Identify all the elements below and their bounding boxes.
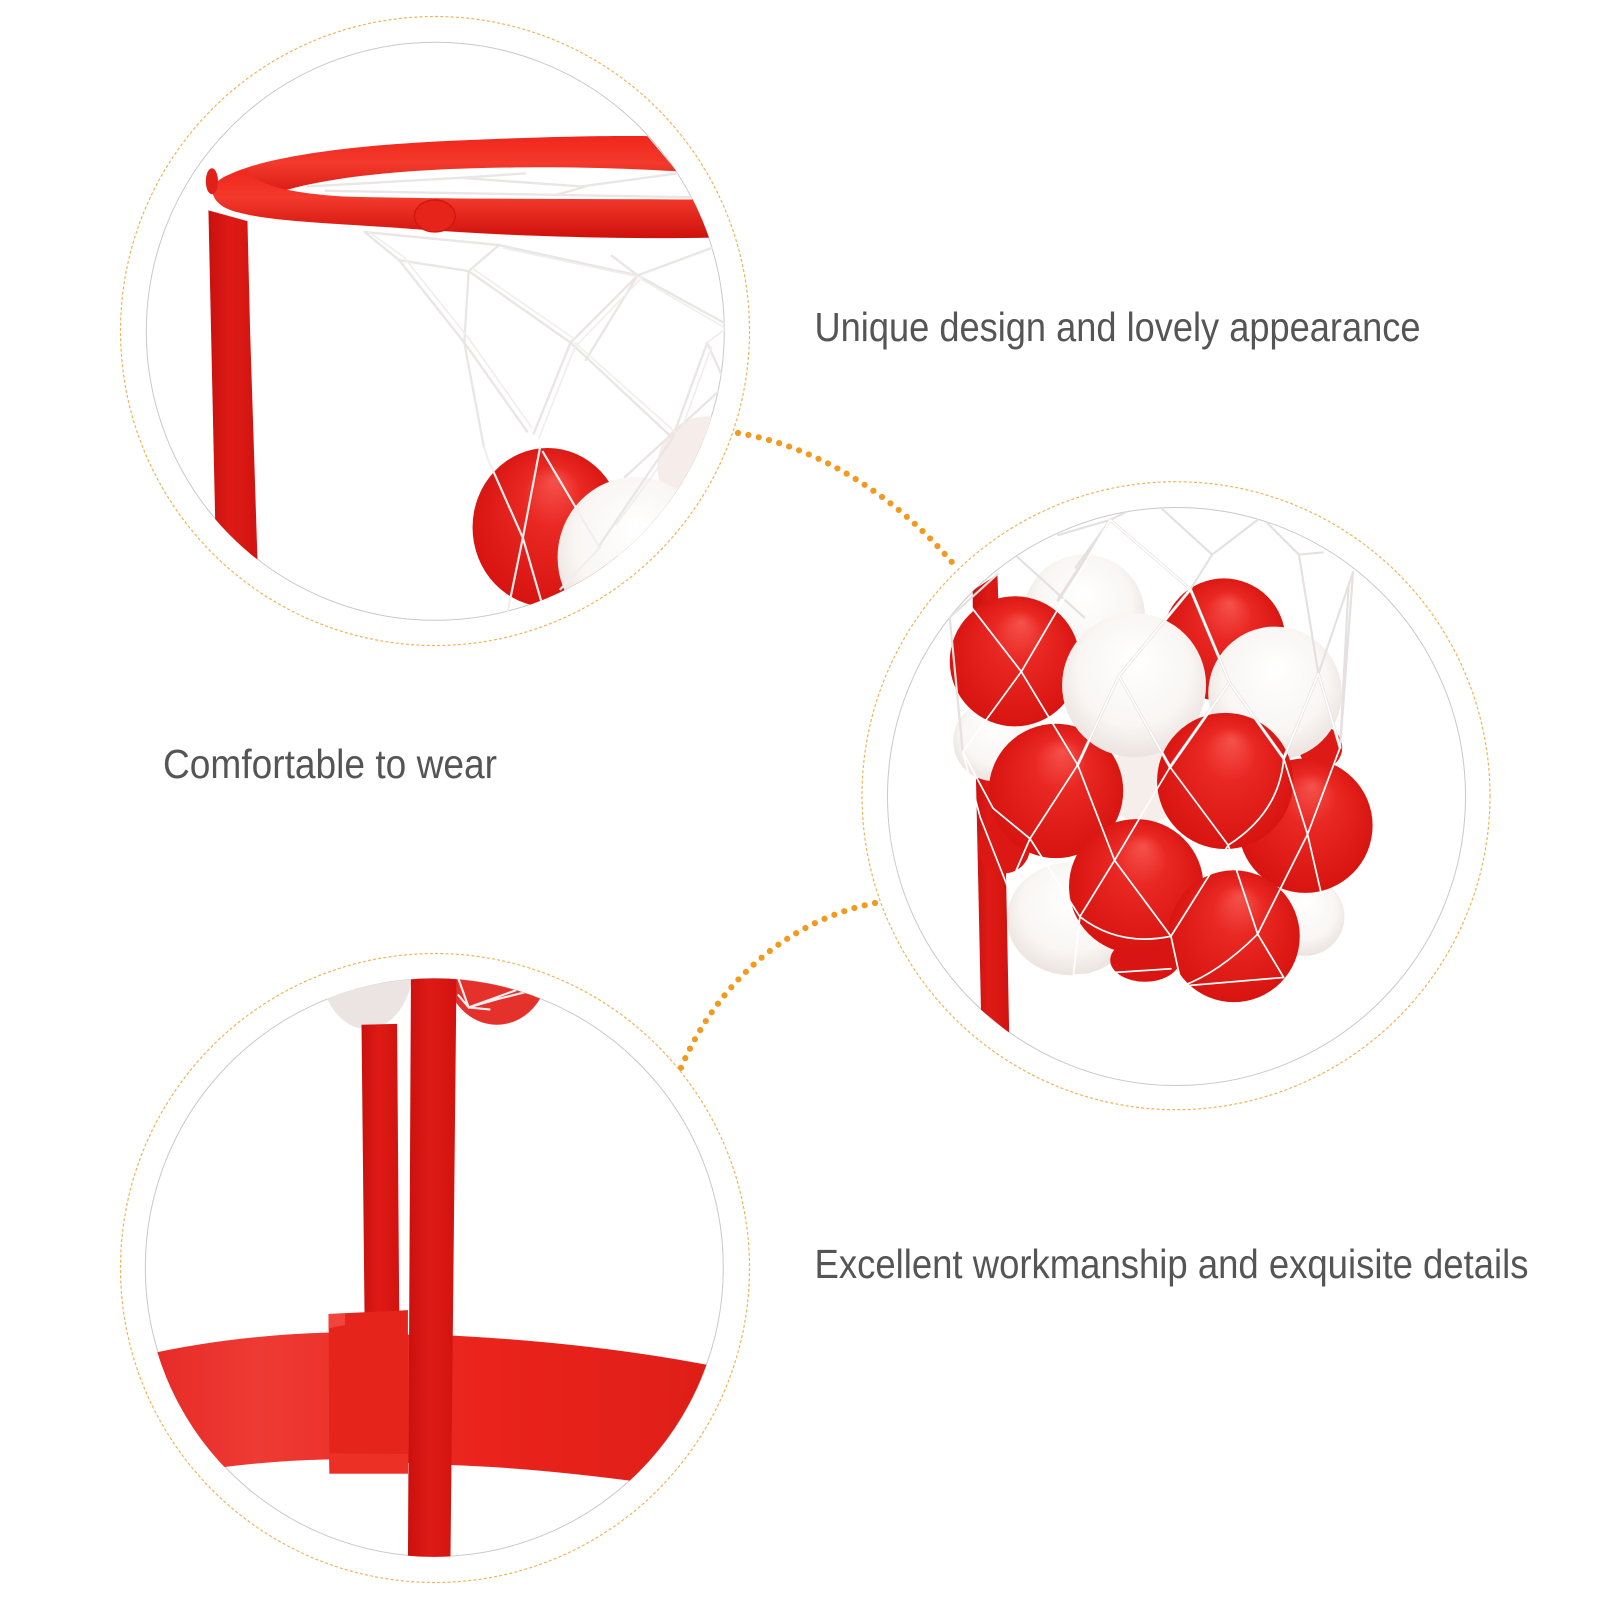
hoop: front tube (212, 170, 712, 238)
dotted connector: top circle to middle circle (738, 433, 956, 567)
ball: white top (328, 979, 412, 1029)
net: upper light strands (950, 509, 1353, 752)
hoop: net clip (414, 200, 455, 232)
support post (208, 210, 258, 572)
back net (308, 173, 694, 197)
net: white strands (963, 520, 1340, 986)
balls: front row (950, 596, 1373, 1002)
panel: net full of balls (862, 482, 1490, 1110)
ball: white (558, 477, 678, 590)
support post (973, 574, 1009, 1033)
heading: unique design: Unique design and lovely appearance (814, 304, 1420, 350)
panel: hoop rim detail (120, 16, 757, 646)
hoop: left nub (206, 168, 218, 194)
hoop: back tube (226, 136, 676, 190)
ball: red top (446, 978, 540, 1025)
heading: excellent workmanship: Excellent workmanship and exquisite details (814, 1241, 1528, 1287)
balls: back row (953, 555, 1344, 982)
net strands (365, 232, 725, 612)
dotted connector: middle circle to bottom circle (680, 903, 875, 1070)
panel: headband and posts (120, 899, 750, 1582)
net knot on red ball (457, 980, 526, 1011)
net: strand outline (1058, 520, 1340, 767)
heading: comfortable: Comfortable to wear (163, 741, 497, 787)
photo: band, bracket and posts (157, 978, 706, 1557)
small post (362, 1024, 399, 1317)
bracket (329, 1310, 408, 1474)
tall post (408, 975, 457, 1563)
ball: pale back (657, 416, 712, 500)
headband (157, 1332, 706, 1481)
photo: rim, post, net and balls (206, 136, 724, 612)
photo: balls in net (950, 509, 1373, 1033)
ball: red (473, 448, 623, 607)
